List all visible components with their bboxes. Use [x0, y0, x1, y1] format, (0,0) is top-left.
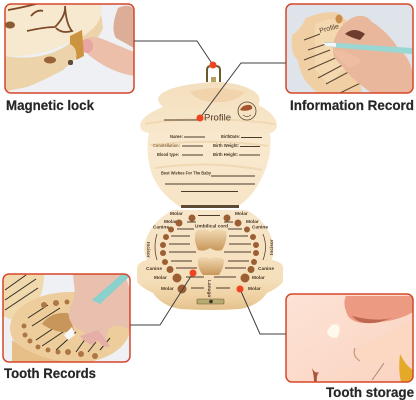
- tray labels: Lanugo: [206, 280, 212, 297]
- form fields: Best Wishes For The Baby: [161, 170, 211, 176]
- form fields: Constellation:: [153, 143, 180, 148]
- panel: information record photo: [286, 4, 413, 93]
- form fields: Name:: [170, 134, 183, 139]
- arrow: tooth storage leader: [236, 286, 286, 334]
- panel: information record photo: Profile: [319, 23, 340, 35]
- heading: Information Record: Information Record: [290, 97, 414, 113]
- tray labels: Molar: [248, 286, 261, 292]
- tray labels: Molar: [154, 275, 167, 281]
- panel: wooden lid with profile form: [140, 82, 277, 207]
- form fields: Birth Height:: [213, 152, 238, 157]
- icon: baby face: [238, 102, 256, 120]
- arrow: tooth records leader: [130, 270, 196, 325]
- tooth holes: [160, 214, 259, 294]
- tray labels: Incisor: [145, 242, 151, 258]
- panel: magnetic lock photo: [5, 4, 134, 93]
- form fields: Blood type:: [157, 152, 179, 157]
- tray shape: [137, 210, 283, 310]
- tray labels: Molar: [246, 219, 259, 225]
- heading: Tooth Records: Tooth Records: [4, 365, 96, 381]
- tray labels: Molar: [235, 211, 248, 217]
- arrow: information record leader: [196, 63, 286, 122]
- tray labels: Umbilical cord: [195, 224, 228, 230]
- heading: Magnetic lock: Magnetic lock: [6, 97, 94, 113]
- tray labels: Molar: [164, 219, 177, 225]
- panel: tooth records photo: [3, 274, 130, 364]
- profile heading: Profile: [204, 112, 231, 124]
- form fields: Birth Weight:: [213, 143, 239, 148]
- tray labels: Canine: [258, 266, 274, 272]
- hinge: [181, 205, 239, 208]
- form fields: BirthDate:: [221, 134, 240, 139]
- tray labels: Canine: [252, 224, 268, 230]
- tray labels: Molar: [252, 275, 265, 281]
- tray labels: Molar: [161, 286, 174, 292]
- record lines: [169, 216, 251, 288]
- tray labels: [145, 211, 275, 297]
- lid shape: [140, 82, 277, 207]
- form fields: [153, 134, 262, 192]
- central tooth cavities: [195, 229, 226, 275]
- tray latch: [197, 299, 224, 304]
- arrow: magnetic lock leader: [134, 41, 216, 68]
- tray labels: Incisor: [269, 239, 275, 255]
- tray labels: Canine: [146, 266, 162, 272]
- icon: gold clasp: [207, 66, 220, 82]
- brackets: [155, 234, 266, 260]
- tray labels: Molar: [170, 211, 183, 217]
- tray labels: Canine: [153, 224, 169, 230]
- panel: wooden tooth tray: [137, 210, 283, 310]
- heading: Tooth storage: Tooth storage: [326, 384, 414, 400]
- panel: tooth storage photo: [286, 294, 413, 382]
